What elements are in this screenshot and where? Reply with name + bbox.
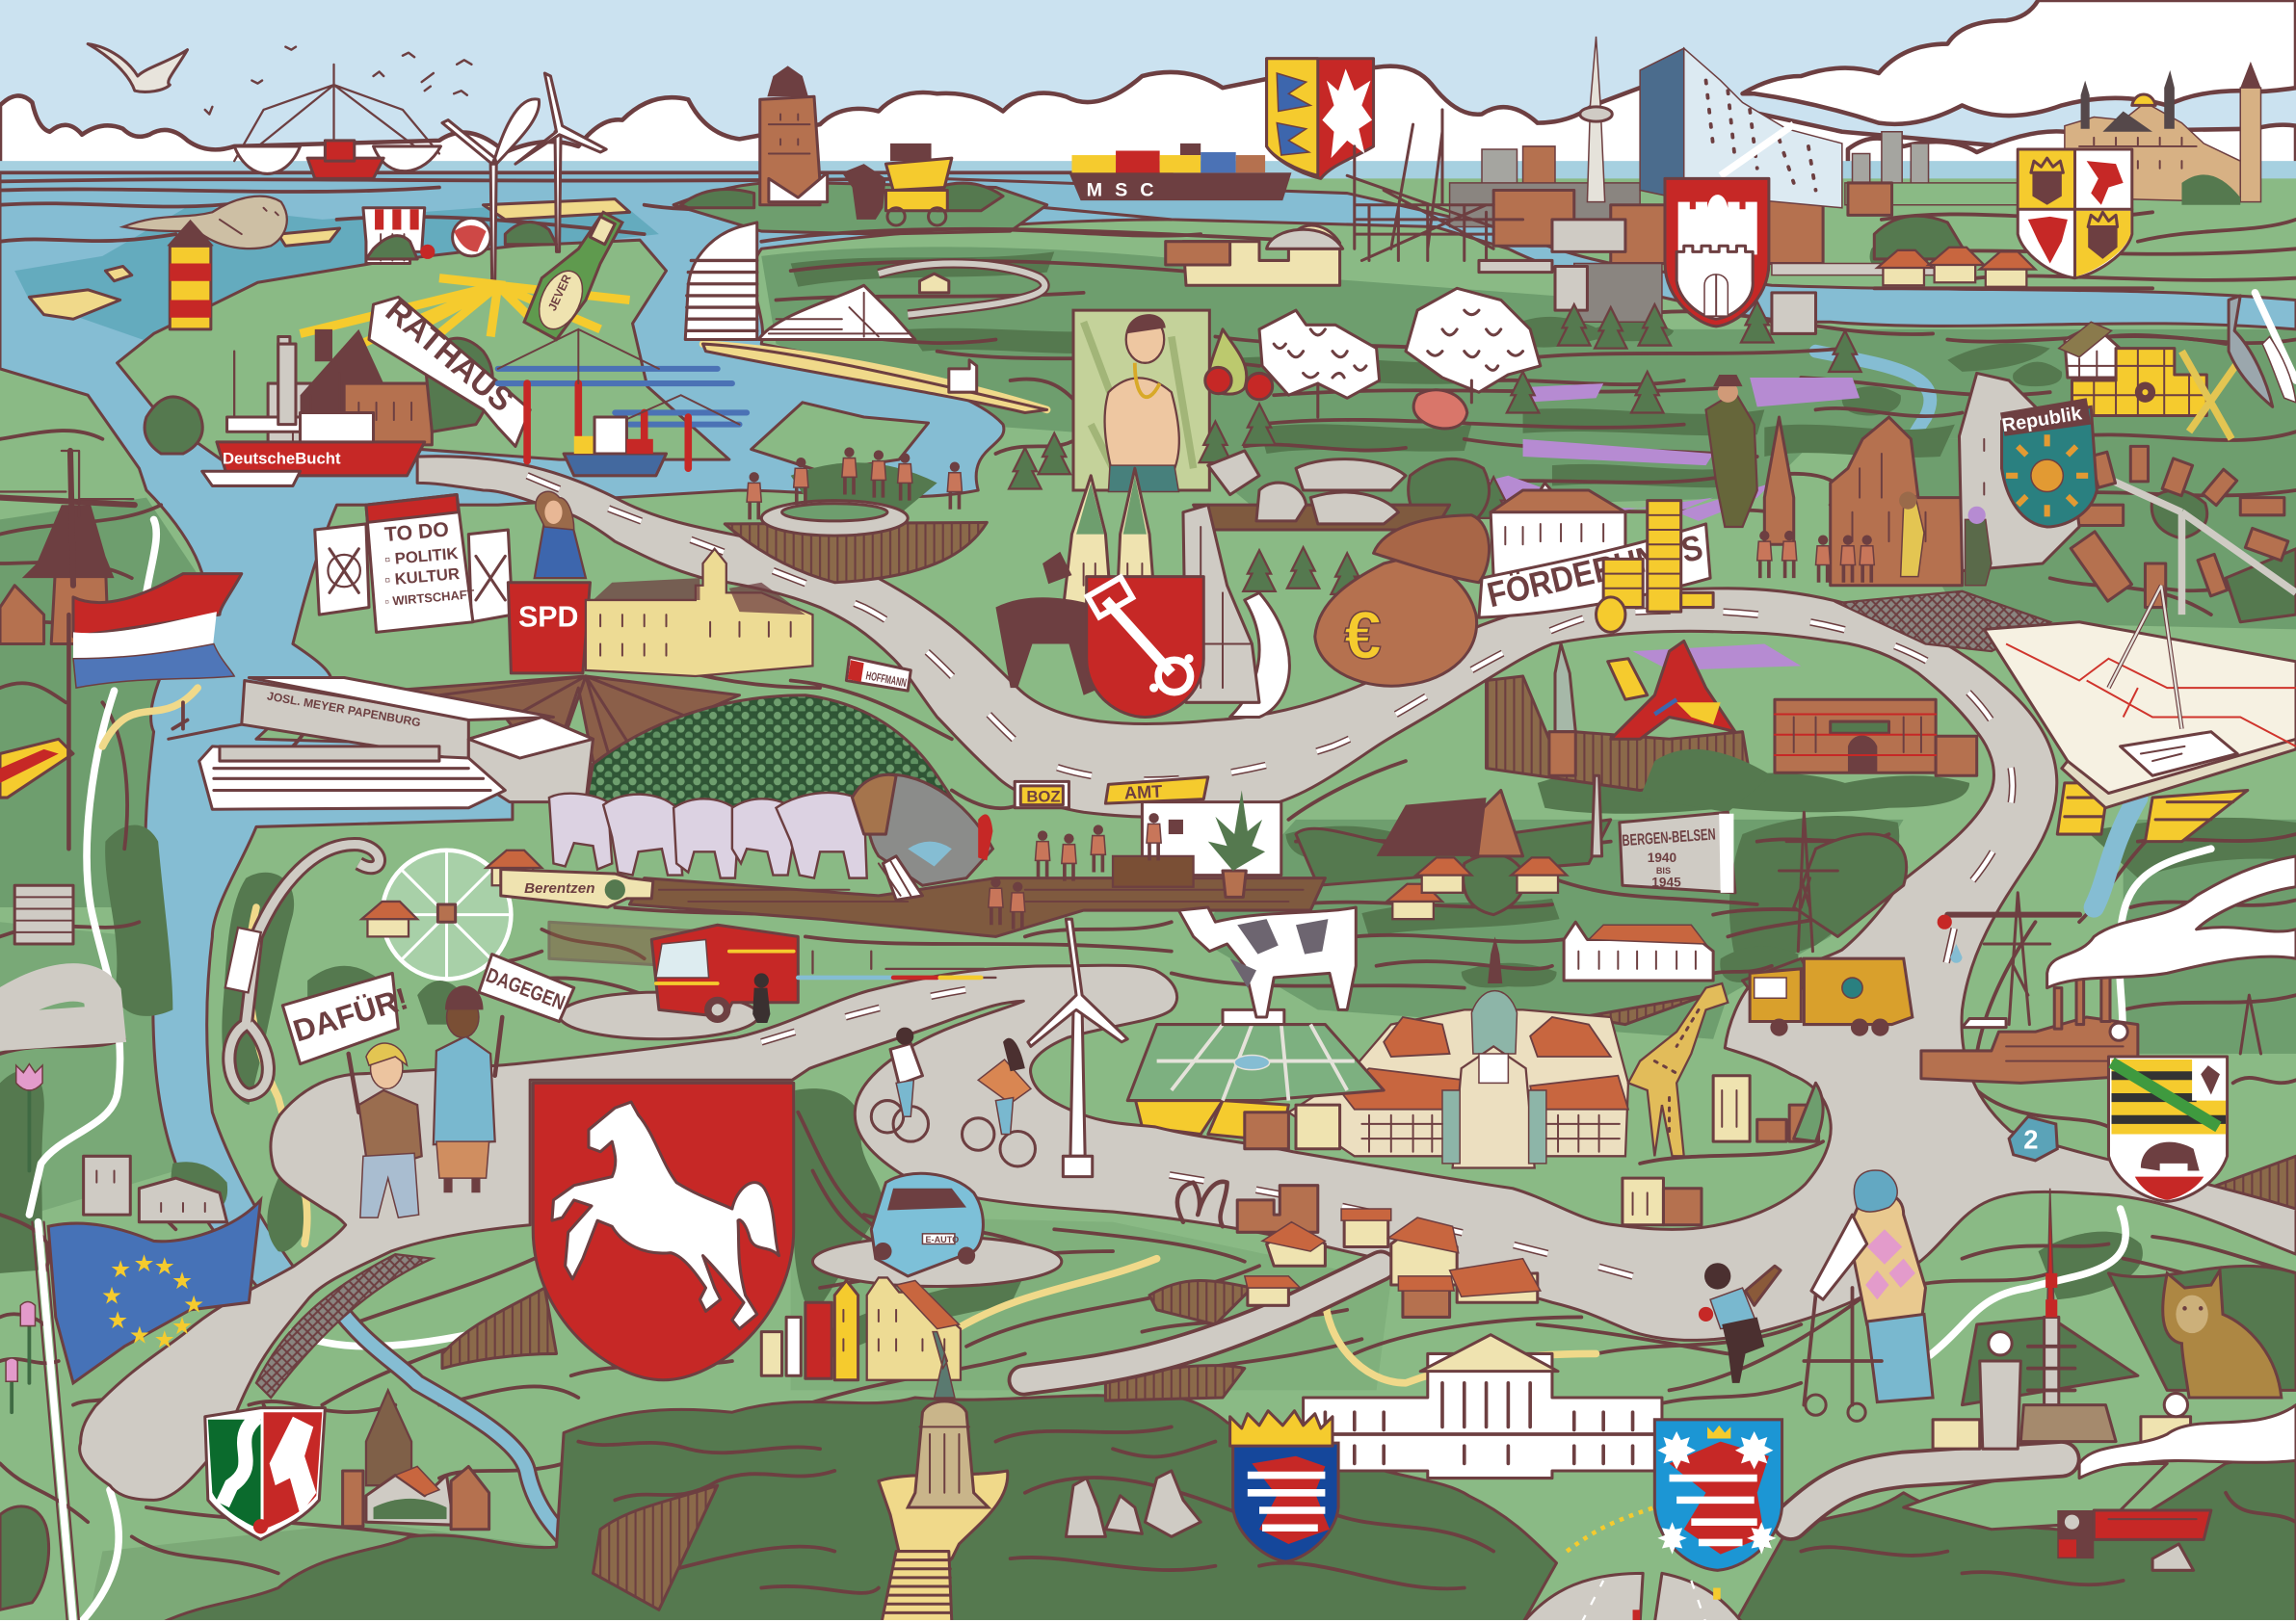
fire truck — [651, 925, 798, 1023]
Berentzen bottle: Berentzen — [524, 880, 595, 897]
Wendland round village — [2020, 439, 2296, 622]
wheel-shaped fortress town — [307, 851, 541, 1025]
water: North Sea, Weser and Ems — [0, 172, 1172, 1302]
Neuwerk lighthouse tower — [760, 65, 828, 205]
Berentzen bottle — [501, 870, 653, 907]
cabbage field — [586, 695, 966, 826]
European flag — [32, 1200, 261, 1623]
To Do list sign: ▫ KULTUR — [383, 564, 461, 589]
fire truck plaza — [560, 992, 758, 1039]
European flag: ★ — [155, 1328, 173, 1351]
purple heather — [1479, 378, 1860, 521]
trees at Jade coast — [145, 222, 557, 454]
AMT office with desk — [1105, 777, 1281, 897]
windmill — [0, 451, 135, 644]
sign DAGEGEN — [479, 955, 574, 1076]
Meyer Werft shipyard hall — [169, 677, 594, 802]
river Hase — [334, 1302, 568, 1542]
yellow fields left and east — [0, 739, 2248, 1141]
Wendland Republik shield: Republik — [2000, 403, 2083, 436]
side road — [0, 982, 2062, 1522]
Town Musicians of Bremen — [995, 552, 1101, 695]
crowd of people — [1757, 492, 1992, 586]
Hamburg skyline — [1450, 37, 2124, 333]
river Aller — [2094, 798, 2138, 907]
seal — [123, 196, 287, 249]
container ship MSC: MSC — [1087, 180, 1154, 201]
Hesse coat of arms — [1230, 1411, 1338, 1561]
Lower Saxony coat of arms with white horse — [533, 1083, 794, 1380]
European flag: ★ — [108, 1309, 127, 1332]
Statue of Liberty and rollercoaster — [1487, 644, 1801, 812]
nuclear dome plant — [1166, 225, 1343, 285]
pine trees north — [1009, 301, 1861, 594]
Herrenhausen gardens — [1127, 1009, 1384, 1101]
dark tree blob right of stones — [1409, 458, 1490, 527]
cathedral of Bremen — [1062, 468, 1157, 629]
island trees — [681, 183, 1003, 211]
RATHAUS banner: RATHAUS — [379, 292, 520, 419]
potato — [1413, 390, 1467, 429]
To Do list sign: ▫ WIRTSCHAFT — [384, 587, 475, 609]
Hesse parliament — [1304, 1335, 1662, 1479]
Hannover New Town Hall — [1245, 936, 1628, 1167]
Hoffmann sign: HOFFMANN — [865, 668, 908, 690]
container ship MSC — [1069, 144, 1291, 201]
beach ball — [420, 218, 490, 259]
lightship Deutsche Bucht — [202, 344, 425, 485]
cyclist woman — [962, 1038, 1035, 1166]
yellow striped field — [301, 278, 630, 352]
fruits pears and apples — [1205, 329, 1273, 400]
town below MV arms — [1874, 216, 2152, 288]
land: Jade peninsula — [118, 240, 729, 459]
European flag: ★ — [135, 1252, 153, 1275]
painting of pregnant woman — [1073, 310, 1209, 492]
NRW coat of arms — [205, 1408, 325, 1539]
Schleswig-Holstein coat of arms — [1267, 59, 1374, 178]
hexagon road sign number 2: 2 — [2023, 1125, 2039, 1155]
Bremen coat of arms — [1087, 577, 1203, 717]
protester woman — [434, 985, 495, 1192]
turkey — [853, 774, 992, 900]
Lüneburg church and gabled brick buildings — [1764, 373, 2079, 586]
European flag: ★ — [112, 1258, 130, 1281]
Bergen-Belsen memorial — [1592, 775, 1735, 893]
Schwerin castle — [2065, 62, 2261, 205]
round table people and dark wooden base — [725, 447, 987, 583]
brick zoo palace — [1775, 699, 1977, 775]
mid-green field patches — [0, 247, 2296, 1390]
distant small figures on Ems — [172, 702, 188, 729]
European flag: ★ — [172, 1315, 191, 1338]
Bergen-Belsen memorial: BERGEN-BELSEN — [1622, 825, 1716, 850]
boy with ball — [1699, 1263, 1781, 1383]
village cluster south of road — [1237, 1186, 1541, 1317]
land: Weser island — [752, 403, 929, 471]
VW power plant — [1921, 936, 2138, 1083]
Oldenburg palace — [586, 549, 812, 676]
queue of people at office — [989, 825, 1105, 929]
bottom image edge — [0, 1620, 2296, 1623]
buildings right of Hannover — [1623, 1076, 1823, 1225]
steam of train — [2079, 1405, 2296, 1479]
lynx — [2163, 1270, 2282, 1398]
giraffe — [1628, 983, 1728, 1156]
To Do list sign: ▫ POLITIK — [383, 544, 459, 568]
Hannover horse sculpture — [1177, 1182, 1227, 1226]
lightship Deutsche Bucht: DeutscheBucht — [223, 450, 341, 468]
BOZ sign: BOZ — [1026, 788, 1061, 806]
brown plowed fan field — [388, 676, 739, 783]
protester with glasses — [358, 1043, 422, 1217]
Sail City tower — [685, 223, 757, 339]
Wilhelmshaven port cranes — [498, 329, 747, 476]
Elbphilharmonie — [1640, 48, 1842, 208]
Brocken transmitter — [1933, 1189, 2191, 1449]
west small city block — [14, 885, 73, 944]
crane and water drop — [1938, 915, 2079, 963]
Osnabrück town — [343, 1390, 489, 1530]
horizon sea strip — [0, 161, 2296, 178]
cobbled road — [1837, 591, 2050, 651]
beach strip — [702, 344, 1047, 412]
electricity pylons — [1780, 812, 2261, 1054]
gabled houses Münster — [761, 1277, 961, 1380]
SPD lectern — [508, 583, 590, 673]
Hoffmann sign — [846, 657, 910, 691]
flag of the Netherlands — [68, 574, 242, 849]
Thuringia coat of arms — [1654, 1420, 1782, 1570]
European flag: ★ — [130, 1323, 148, 1347]
Jever beer bottle: JEVER — [545, 273, 574, 313]
parrots — [1608, 641, 1735, 739]
Bergen-Belsen memorial: 1940 — [1648, 851, 1677, 865]
small beach house — [949, 360, 977, 392]
beach chair Strandkorb — [363, 208, 425, 263]
European flag: ★ — [172, 1270, 191, 1293]
Bad Bentheim castle — [84, 1156, 227, 1222]
nuclear waste barrels — [2072, 349, 2248, 439]
e-car on plinth: E-AUTO — [925, 1235, 959, 1244]
Celle castle — [1564, 922, 1713, 981]
megalith stones — [1194, 451, 1450, 530]
dark forest mid-north — [1296, 820, 1907, 1000]
tidal flats — [0, 172, 1172, 352]
Meyer Werft shipyard hall: JOSL. MEYER PAPENBURG — [266, 689, 422, 729]
Hamburg coat of arms — [1665, 178, 1769, 327]
Bergen-Belsen memorial: BIS — [1656, 866, 1671, 876]
sign DAGEGEN: DAGEGEN! — [483, 963, 573, 1016]
Wendland Republik shield — [2000, 398, 2097, 527]
Hermann monument — [879, 1332, 1008, 1558]
offshore wind turbines — [442, 73, 606, 281]
tulips — [6, 1064, 42, 1412]
striped brown fields — [442, 995, 2296, 1610]
church and village north of Celle — [1377, 790, 1567, 919]
birds flock — [205, 47, 471, 115]
sign DAFÜR — [282, 973, 412, 1113]
cyclist man — [871, 1028, 929, 1141]
garbage truck — [1750, 958, 1913, 1036]
stone viaduct — [256, 1254, 432, 1398]
river Hase water — [334, 1302, 568, 1542]
Klimahaus — [758, 285, 915, 339]
seagull — [88, 44, 188, 92]
hiker hunter — [1706, 375, 1757, 527]
Förderung banner: FÖRDERUNGS — [1484, 527, 1706, 615]
clouds — [0, 0, 2296, 172]
curved island road and house — [879, 263, 1044, 315]
politician woman — [535, 491, 586, 578]
pigs — [549, 793, 867, 878]
AMT office with desk: AMT — [1123, 781, 1163, 803]
water: tributary — [1816, 352, 1930, 465]
Roland statue and white road frame — [1183, 505, 1289, 717]
Jever beer bottle — [524, 212, 622, 339]
map with compass — [1984, 586, 2296, 808]
heron — [2229, 296, 2296, 406]
forest and hills south — [0, 1266, 2296, 1623]
steps at Hermann monument — [882, 1552, 952, 1623]
wind turbine on road — [1028, 919, 1127, 1177]
coins — [1597, 501, 1713, 632]
land: Neuwerk island — [673, 182, 1047, 234]
SPD lectern: SPD — [518, 600, 578, 633]
BOZ sign — [1015, 781, 1069, 808]
smoke from power plant — [2047, 856, 2296, 988]
shrimp trawler with nets — [234, 65, 440, 178]
To Do list sign: TO DO — [383, 517, 450, 546]
horse carriage — [842, 144, 952, 225]
Sachsen-Anhalt coat of arms — [2108, 1057, 2228, 1201]
Brocken steam train — [2057, 1510, 2211, 1570]
Autobahn — [1523, 1507, 1743, 1623]
Externsteine rocks — [1066, 1471, 1201, 1536]
striped lighthouse — [167, 220, 214, 329]
brown terraces below pigs — [549, 878, 1325, 973]
To Do list sign — [315, 495, 513, 632]
road center dashes — [527, 476, 2013, 1276]
harbour cranes Hamburg — [1347, 110, 1523, 260]
European flag: ★ — [184, 1293, 203, 1316]
hexagon road sign number 2 — [2009, 1116, 2057, 1161]
loop road with cable car — [225, 845, 379, 1095]
water: Elbe river — [937, 178, 2296, 329]
Fachwerk house and barrels — [2059, 322, 2124, 378]
cow — [1178, 907, 1356, 1017]
Emden town hall — [268, 329, 432, 454]
sports field — [798, 952, 995, 978]
Mecklenburg-Vorpommern coat of arms — [2018, 149, 2132, 278]
sand paths — [102, 344, 1597, 1383]
money bag: € — [1344, 598, 1382, 673]
road network — [80, 457, 2296, 1500]
money bag — [1315, 515, 1490, 686]
palace behind Förderung banner — [1491, 483, 1625, 578]
old woman with walker — [1804, 1170, 1933, 1421]
European flag: ★ — [155, 1255, 173, 1278]
European flag: ★ — [102, 1284, 120, 1307]
white horse — [552, 1102, 779, 1329]
e-car on plinth — [812, 1173, 1062, 1287]
white blossoming tree left — [1259, 310, 1380, 417]
sky — [0, 0, 2296, 172]
sign DAFÜR: DAFÜR! — [289, 981, 412, 1048]
Bergen-Belsen memorial: 1945 — [1651, 876, 1681, 890]
cruise ship — [199, 746, 505, 809]
white blossoming tree right — [1406, 288, 1541, 403]
